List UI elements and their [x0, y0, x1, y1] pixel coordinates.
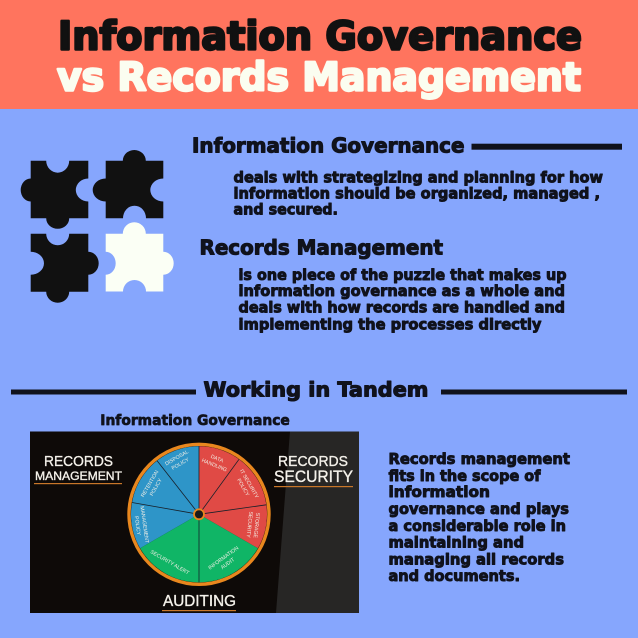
wheel segment labels: AUDIT — [220, 557, 237, 571]
label: records management: MANAGEMENT — [35, 469, 123, 483]
text block: records management definition: deals with how records are handled and — [238, 299, 565, 317]
text block: working in tandem description: maintaining and — [388, 534, 524, 552]
wheel segment labels: SECURITY — [245, 511, 253, 538]
wheel segment labels: POLICY — [235, 478, 250, 498]
panel: governance wheel image — [30, 432, 359, 613]
text block: working in tandem description: and documents. — [388, 567, 520, 585]
text block: working in tandem description — [388, 450, 570, 585]
text block: working in tandem description: Records management — [388, 450, 570, 468]
wheel segment labels: POLICY — [171, 457, 191, 472]
label: records security: SECURITY — [274, 467, 353, 486]
wheel segment labels: DATA — [210, 454, 224, 465]
text block: records management definition — [238, 266, 567, 333]
text block: information governance definition: deals with strategizing and planning for how — [234, 168, 603, 186]
wheel segment labels: MANAGEMENT — [138, 506, 150, 544]
heading: Records Management: Records Management — [200, 236, 443, 260]
header banner — [0, 0, 638, 109]
label: records management: RECORDS — [44, 453, 113, 470]
wheel segment labels: POLICY — [133, 516, 141, 536]
wheel segment labels: POLICY — [149, 477, 164, 497]
wheel segment labels: DISPOSAL — [164, 449, 190, 467]
text block: working in tandem description: fits in the scope of — [388, 467, 541, 485]
section heading: Working in Tandem — [11, 378, 627, 402]
wheel segment labels: RETENTION — [140, 469, 160, 498]
wheel segment labels: SECURITY ALERT — [149, 549, 191, 577]
title line 1: Information Governance — [58, 14, 582, 60]
text block: records management definition: information governance as a whole and — [238, 282, 565, 300]
text block: information governance definition: information should be organized, managed , — [234, 184, 600, 202]
label: auditing: AUDITING — [163, 593, 236, 610]
chart caption: Information Governance — [100, 413, 290, 429]
wheel segment labels: IT SECURITY — [238, 469, 260, 500]
text block: working in tandem description: information — [388, 483, 490, 501]
text block: information governance definition: and secured. — [234, 200, 338, 218]
title line 2: vs Records Management — [57, 56, 581, 100]
label: records security: RECORDS — [278, 453, 348, 470]
text block: records management definition: implementing the processes directly — [238, 315, 542, 333]
heading rule — [472, 144, 622, 150]
wheel segment labels: STORAGE — [252, 512, 260, 539]
text block: records management definition: is one piece of the puzzle that makes up — [238, 266, 567, 284]
wheel segment labels: HANDLING — [201, 458, 228, 473]
icon: four puzzle pieces — [21, 150, 174, 303]
pie chart: governance wheel — [129, 444, 269, 584]
wheel segment labels: INFORMATION — [208, 545, 240, 571]
text block: working in tandem description: a considerable role in — [388, 517, 566, 535]
label: records management — [34, 453, 123, 484]
label: records security — [274, 453, 353, 487]
text block: working in tandem description: governance and plays — [388, 500, 569, 518]
text block: information governance definition — [234, 168, 603, 218]
section heading: Working in Tandem: Working in Tandem — [204, 378, 428, 402]
text block: working in tandem description: managing all records — [388, 550, 564, 568]
wheel segment labels — [131, 449, 260, 577]
heading: Information Governance: Information Governance — [192, 134, 464, 158]
